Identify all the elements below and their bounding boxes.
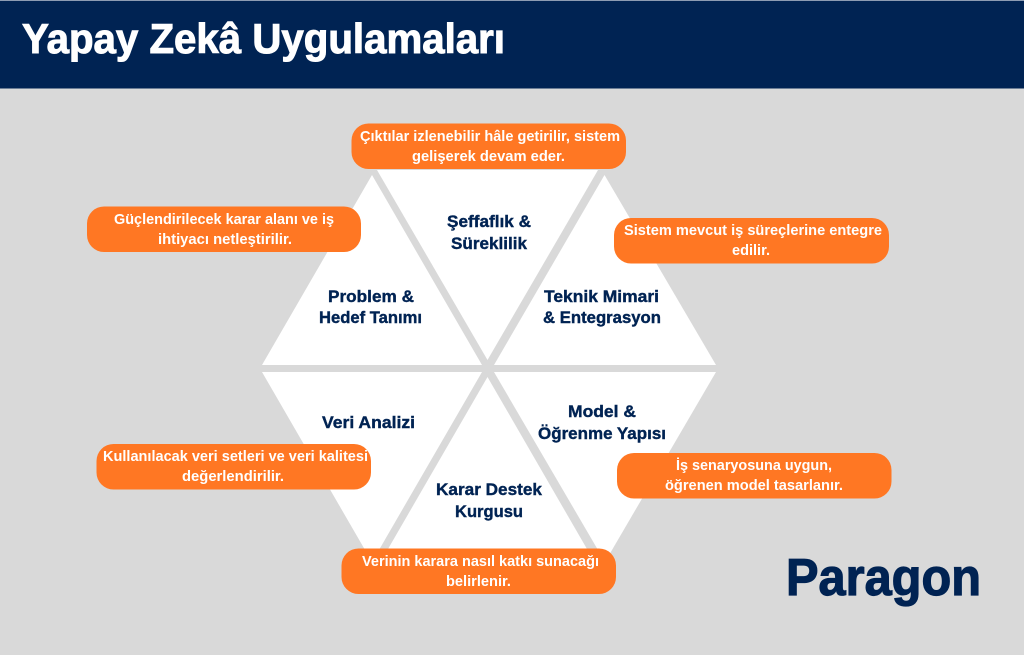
title: Yapay Zekâ Uygulamaları [22, 15, 505, 62]
callout: upper right [614, 218, 889, 264]
header banner [0, 0, 1024, 88]
panel: Problem & Hedef Tanımı: Hedef Tanımı [319, 308, 422, 327]
panel: Teknik Mimari & Entegrasyon: Teknik Mimari [544, 287, 659, 306]
panel: Problem & Hedef Tanımı [262, 175, 482, 365]
callout: lower left: değerlendirilir. [182, 468, 284, 485]
panel: Karar Destek Kurgusu: Kurgusu [455, 502, 523, 521]
callout: bottom: Verinin karara nasıl katkı sunacağı [362, 553, 599, 570]
panel: Teknik Mimari & Entegrasyon: & Entegrasyon [543, 308, 661, 327]
callout: top [352, 124, 626, 169]
callout: lower right [617, 453, 892, 498]
callout: upper right: Sistem mevcut iş süreçlerine entegre [624, 222, 882, 239]
callout: top: Çıktılar izlenebilir hâle getirilir, sistem [360, 128, 620, 145]
callout: bottom [342, 548, 616, 594]
panel: Veri Analizi: Veri Analizi [322, 413, 415, 432]
panel: Karar Destek Kurgusu: Karar Destek [436, 480, 543, 499]
callout: top: gelişerek devam eder. [412, 148, 565, 165]
panel: Problem & Hedef Tanımı: Problem & [328, 287, 414, 306]
callout: lower right: İş senaryosuna uygun, [676, 457, 832, 474]
panel: Şeffaflık & Süreklilik [377, 170, 598, 360]
panel: Şeffaflık & Süreklilik: Şeffaflık & [447, 212, 531, 231]
panel: Şeffaflık & Süreklilik: Süreklilik [451, 234, 528, 253]
panel: Teknik Mimari & Entegrasyon [494, 175, 716, 365]
hexagon diagram [262, 170, 716, 568]
callout: upper right: edilir. [732, 242, 770, 259]
callout: lower left [96, 444, 371, 490]
callout: upper left: ihtiyacı netleştirilir. [158, 231, 292, 248]
panel: Veri Analizi [262, 372, 482, 562]
logo: Paragon: Paragon [786, 549, 981, 607]
panel: Model & Öğrenme Yapısı [494, 372, 716, 562]
callout: lower right: öğrenen model tasarlanır. [665, 477, 843, 494]
callout: upper left [87, 206, 361, 252]
panel: Karar Destek Kurgusu [377, 377, 598, 568]
panel: Model & Öğrenme Yapısı: Öğrenme Yapısı [538, 424, 666, 443]
callout: bottom: belirlenir. [446, 573, 511, 590]
panel: Model & Öğrenme Yapısı: Model & [568, 402, 636, 421]
callout: upper left: Güçlendirilecek karar alanı ve iş [114, 211, 334, 228]
callout: lower left: Kullanılacak veri setleri ve veri kalitesi [103, 448, 368, 465]
